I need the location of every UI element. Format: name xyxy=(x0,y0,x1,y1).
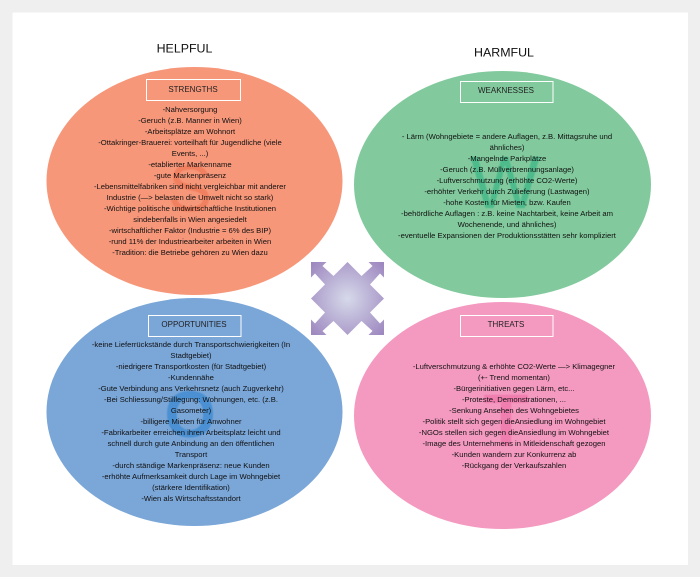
text block: strengths list: sindebenfalls in Wien angesiedelt xyxy=(133,215,248,224)
text block: threats list: (+- Trend momentan) xyxy=(478,373,550,382)
text block: weaknesses list: -Geruch (z.B. Müllverbrennungsanlage) xyxy=(440,165,574,174)
text block: strengths list: -Geruch (z.B. Manner in Wien) xyxy=(138,116,242,125)
text block: weaknesses list: -behördliche Auflagen : z.B. keine Nachtarbeit, keine Arbeit am xyxy=(401,209,613,218)
text block: opportunities list: Gasometer) xyxy=(171,406,212,415)
label: opportunities xyxy=(148,316,241,336)
text block: opportunities list: -Fabrikarbeiter erreichen ihren Arbeitsplatz leicht und xyxy=(101,428,281,437)
text block: threats list: -NGOs stellen sich gegen dieAnsiedlung im Wohngebiet xyxy=(419,428,610,437)
label: threats: THREATS xyxy=(488,320,524,329)
label: strengths xyxy=(146,80,240,100)
text block: opportunities list: Transport xyxy=(175,450,208,459)
panel: threats xyxy=(354,302,651,529)
text block: strengths list xyxy=(94,105,286,257)
text block: strengths list: -rund 11% der Industriearbeiter arbeiten in Wien xyxy=(109,237,271,246)
watermark letter S: S xyxy=(168,151,212,225)
text block: strengths list: Events, ...) xyxy=(172,149,209,158)
text block: strengths list: -Wichtige politische undwirtschaftliche Institutionen xyxy=(104,204,276,213)
text block: threats list: -Proteste, Demonstrationen, ... xyxy=(462,395,566,404)
text block: threats list xyxy=(413,362,616,470)
text block: opportunities list: -Kundennähe xyxy=(168,373,214,382)
text block: threats list: -Image des Unternehmens in Mitleidenschaft gezogen xyxy=(422,439,606,448)
text block: threats list: -Luftverschmutzung & erhöhte CO2-Werte —> Klimagegner xyxy=(413,362,616,371)
label: opportunities: OPPORTUNITIES xyxy=(161,320,227,329)
text block: strengths list: -Ottakringer-Brauerei: vorteilhaft für Jugendliche (viele xyxy=(98,138,282,147)
text block: weaknesses list: ähnliches) xyxy=(490,143,525,152)
text block: opportunities list: -Wien als Wirtschaftsstandort xyxy=(141,494,242,503)
watermark letter T: T xyxy=(483,379,529,462)
text block: weaknesses list: - Lärm (Wohngebiete = andere Auflagen, z.B. Mittagsruhe und xyxy=(402,132,612,141)
heading: helpful: HELPFUL xyxy=(157,42,212,56)
panel: strengths xyxy=(46,67,342,295)
label: weaknesses: WEAKNESSES xyxy=(478,86,534,95)
text block: strengths list: -wirtschaftlicher Faktor (Industrie = 6% des BIP) xyxy=(109,226,271,235)
text block: threats list: -Kunden wandern zur Konkurrenz ab xyxy=(452,450,576,459)
panel: opportunities xyxy=(46,298,342,526)
text block: opportunities list: -Bei Schliessung/Stilllegung: Wohnungen, etc. (z.B. xyxy=(104,395,278,404)
text block: strengths list: Industrie (—> belasten die Umwelt nicht so stark) xyxy=(107,193,274,202)
text block: weaknesses list: -hohe Kosten für Mieten, bzw. Kaufen xyxy=(443,198,571,207)
text block: opportunities list: -niedrigere Transportkosten (für Stadtgebiet) xyxy=(116,362,267,371)
text block: threats list: -Bürgerinitiativen gegen Lärm, etc... xyxy=(453,384,575,393)
text block: opportunities list: -durch ständige Markenpräsenz: neue Kunden xyxy=(112,461,270,470)
text block: weaknesses list xyxy=(398,132,617,240)
label: weaknesses xyxy=(460,82,553,102)
text block: weaknesses list: -Luftverschmutzung (erhöhte CO2-Werte) xyxy=(437,176,578,185)
text block: opportunities list: -billigere Mieten für Anwohner xyxy=(140,417,242,426)
text block: threats list: -Politik stellt sich gegen dieAnsiedlung im Wohngebiet xyxy=(423,417,606,426)
heading: harmful: HARMFUL xyxy=(474,46,534,60)
text block: threats list: -Rückgang der Verkaufszahlen xyxy=(462,461,566,470)
text block: opportunities list: -keine Lieferrückstände durch Transportschwierigkeiten (In xyxy=(92,340,290,349)
icon: four-way diagonal arrows xyxy=(311,262,384,335)
text block: weaknesses list: -Mangelnde Parkplätze xyxy=(468,154,546,163)
text block: weaknesses list: -erhöhter Verkehr durch Zulieferung (Lastwagen) xyxy=(424,187,590,196)
watermark letter W: W xyxy=(470,141,540,224)
text block: strengths list: -gute Markenpräsenz xyxy=(154,171,226,180)
text block: weaknesses list: -eventuelle Expansionen der Produktionsstätten sehr kompliziert xyxy=(398,231,617,240)
text block: opportunities list: Stadtgebiet) xyxy=(170,351,212,360)
text block: strengths list: -Arbeitsplätze am Wohnort xyxy=(145,127,236,136)
text block: weaknesses list: Wochenende, und ähnliches) xyxy=(458,220,557,229)
label: strengths: STRENGTHS xyxy=(168,85,218,94)
text block: strengths list: -Tradition: die Betriebe gehören zu Wien dazu xyxy=(112,248,268,257)
text block: threats list: -Senkung Ansehen des Wohngebietes xyxy=(449,406,579,415)
text block: strengths list: -Lebensmittelfabriken sind nicht vergleichbar mit anderer xyxy=(94,182,286,191)
text block: opportunities list: -Gute Verbindung ans Verkehrsnetz (auch Zugverkehr) xyxy=(98,384,284,393)
text block: opportunities list: schnell durch gute Anbindung an den öffentlichen xyxy=(108,439,274,448)
watermark letter O: O xyxy=(164,377,216,451)
text block: strengths list: -Nahversorgung xyxy=(163,105,217,114)
text block: opportunities list: (stärkere Identifikation) xyxy=(152,483,230,492)
text block: opportunities list: -erhöhte Aufmerksamkeit durch Lage im Wohngebiet xyxy=(102,472,281,481)
text block: opportunities list xyxy=(92,340,290,503)
label: threats xyxy=(460,316,553,336)
panel: weaknesses xyxy=(354,71,651,298)
text block: strengths list: -etablierter Markenname xyxy=(148,160,232,169)
